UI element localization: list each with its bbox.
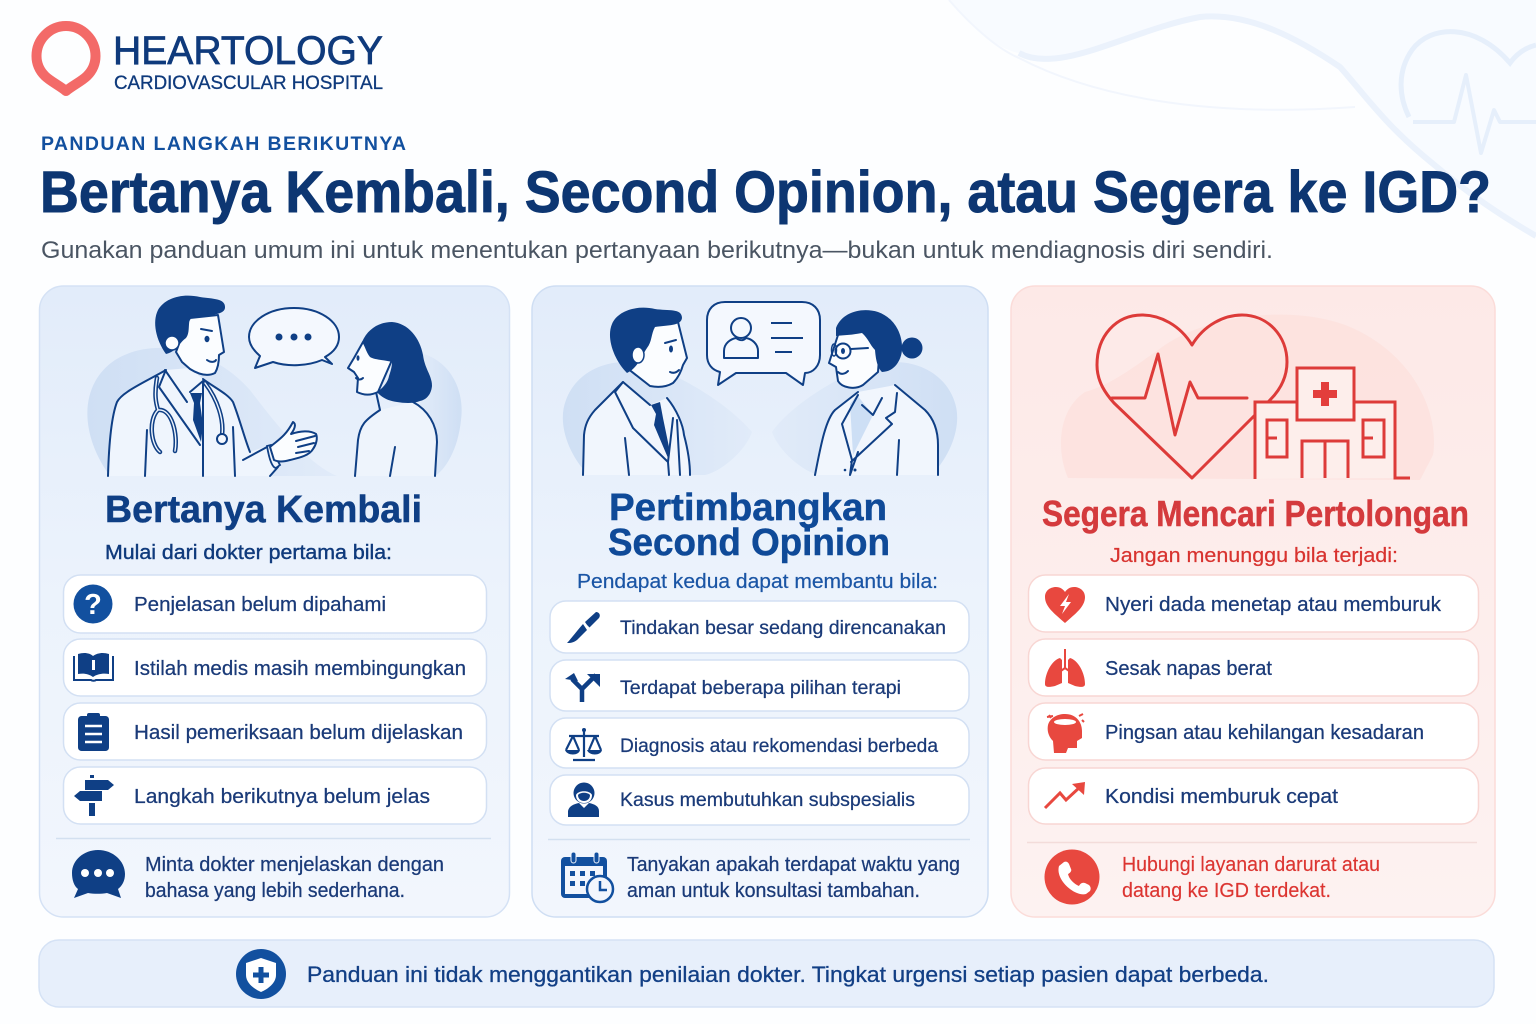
- row text: Kondisi memburuk cepat: [1105, 785, 1338, 808]
- icon: rising arrow: [1045, 782, 1085, 808]
- icon: branching arrows: [565, 673, 600, 702]
- icon: question mark: ?: [84, 589, 102, 621]
- panel background: [532, 286, 988, 917]
- row: istilah: [64, 639, 486, 696]
- disclaimer text: Panduan ini tidak menggantikan penilaian dokter. Tingkat urgensi setiap pasien dapat berbeda.: [307, 962, 1269, 987]
- icon: balance scales: [565, 728, 602, 760]
- illustration: two doctors consulting: [563, 302, 957, 475]
- doctor figure: [108, 296, 317, 476]
- icon: scalpel: [567, 612, 600, 643]
- icon: lungs: [1045, 649, 1085, 687]
- illustration: doctor talking with patient: [87, 296, 462, 476]
- speech bubble: [249, 308, 339, 368]
- panel tip text: aman untuk konsultasi tambahan.: [627, 879, 920, 902]
- icon: chat bubbles: [72, 850, 125, 898]
- panel tip text: [627, 853, 960, 902]
- row: langkah: [64, 767, 486, 824]
- panel intro: Jangan menunggu bila terjadi:: [1110, 545, 1398, 567]
- row text: Sesak napas berat: [1105, 657, 1272, 680]
- panel tip text: Minta dokter menjelaskan dengan: [145, 853, 444, 876]
- row: sesak napas: [1028, 639, 1478, 696]
- logo wordmark: HEARTOLOGY: [113, 29, 383, 73]
- row text: Pingsan atau kehilangan kesadaran: [1105, 721, 1424, 744]
- panel tip text: bahasa yang lebih sederhana.: [145, 879, 405, 902]
- hospital: [1255, 368, 1410, 479]
- row text: Kasus membutuhkan subspesialis: [620, 789, 915, 811]
- row text: Diagnosis atau rekomendasi berbeda: [620, 735, 938, 757]
- icon: shield: [236, 949, 286, 999]
- panel background: [1011, 286, 1495, 917]
- row: diagnosis berbeda: [550, 718, 969, 768]
- row text: Hasil pemeriksaan belum dijelaskan: [134, 721, 463, 744]
- second doctor: [815, 310, 938, 475]
- panel tip text: [145, 853, 444, 902]
- icon: question mark: [74, 584, 112, 624]
- icon: dizzy head: [1047, 714, 1084, 753]
- icon: specialist doctor: [568, 782, 599, 817]
- panel heading: Segera Mencari Pertolongan: [1042, 493, 1469, 534]
- row text: Tindakan besar sedang direncanakan: [620, 617, 946, 639]
- row text: Langkah berikutnya belum jelas: [134, 785, 430, 808]
- icon: signpost: [74, 775, 114, 816]
- row: tindakan besar: [550, 601, 969, 653]
- panel tip text: Tanyakan apakah terdapat waktu yang: [627, 853, 960, 876]
- row: pilihan terapi: [550, 660, 969, 711]
- heart outline with pulse: [1097, 315, 1287, 478]
- panel: Pertimbangkan Second Opinion: [532, 286, 988, 917]
- panel heading: Second Opinion: [608, 522, 890, 564]
- panel: Bertanya Kembali: [40, 286, 510, 917]
- icon: heart with bolt: [1045, 587, 1085, 623]
- decorative top-right swoosh and heartbeat: [949, 0, 1536, 236]
- stethoscope tube: [152, 378, 222, 452]
- panel heading: Bertanya Kembali: [105, 489, 422, 531]
- first doctor: [583, 308, 690, 475]
- panel: Segera Mencari Pertolongan: [1011, 286, 1495, 917]
- row: memburuk cepat: [1028, 768, 1478, 824]
- row text: Istilah medis masih membingungkan: [134, 657, 466, 680]
- icon: logo pin ring: [36, 26, 96, 91]
- hospital cross: [1313, 382, 1337, 406]
- icon: calendar with clock: [561, 852, 613, 902]
- panel tip text: Hubungi layanan darurat atau: [1122, 853, 1380, 876]
- row text: Terdapat beberapa pilihan terapi: [620, 677, 901, 699]
- panel heading: Pertimbangkan: [609, 487, 887, 529]
- patient figure: [348, 322, 437, 476]
- row text: Nyeri dada menetap atau memburuk: [1105, 593, 1442, 616]
- disclaimer bar: [39, 940, 1494, 1007]
- row: pingsan: [1028, 703, 1478, 760]
- logo: [36, 26, 383, 94]
- row: hasil: [64, 703, 486, 760]
- subtitle: Gunakan panduan umum ini untuk menentukan pertanyaan berikutnya—bukan untuk mendiagnosis diri sendiri.: [41, 237, 1273, 264]
- illustration: heart with pulse and hospital: [1061, 315, 1434, 480]
- eyebrow heading: PANDUAN LANGKAH BERIKUTNYA: [41, 133, 406, 155]
- panel tip text: datang ke IGD terdekat.: [1122, 879, 1331, 902]
- row: penjelasan: [64, 575, 486, 633]
- row text: Penjelasan belum dipahami: [134, 593, 386, 616]
- icon: clipboard: [78, 713, 109, 751]
- panel intro: Mulai dari dokter pertama bila:: [105, 541, 392, 564]
- icon: phone: [1044, 850, 1100, 904]
- panel tip text: [1122, 853, 1380, 902]
- logo subtitle: CARDIOVASCULAR HOSPITAL: [114, 73, 383, 94]
- row: subspesialis: [550, 775, 969, 825]
- panel intro: Pendapat kedua dapat membantu bila:: [577, 571, 938, 593]
- row: nyeri dada: [1028, 575, 1478, 632]
- icon: open book: [74, 653, 113, 681]
- speech bubble with patient record: [707, 302, 820, 385]
- panel background: [40, 286, 510, 917]
- panel heading: [608, 487, 890, 564]
